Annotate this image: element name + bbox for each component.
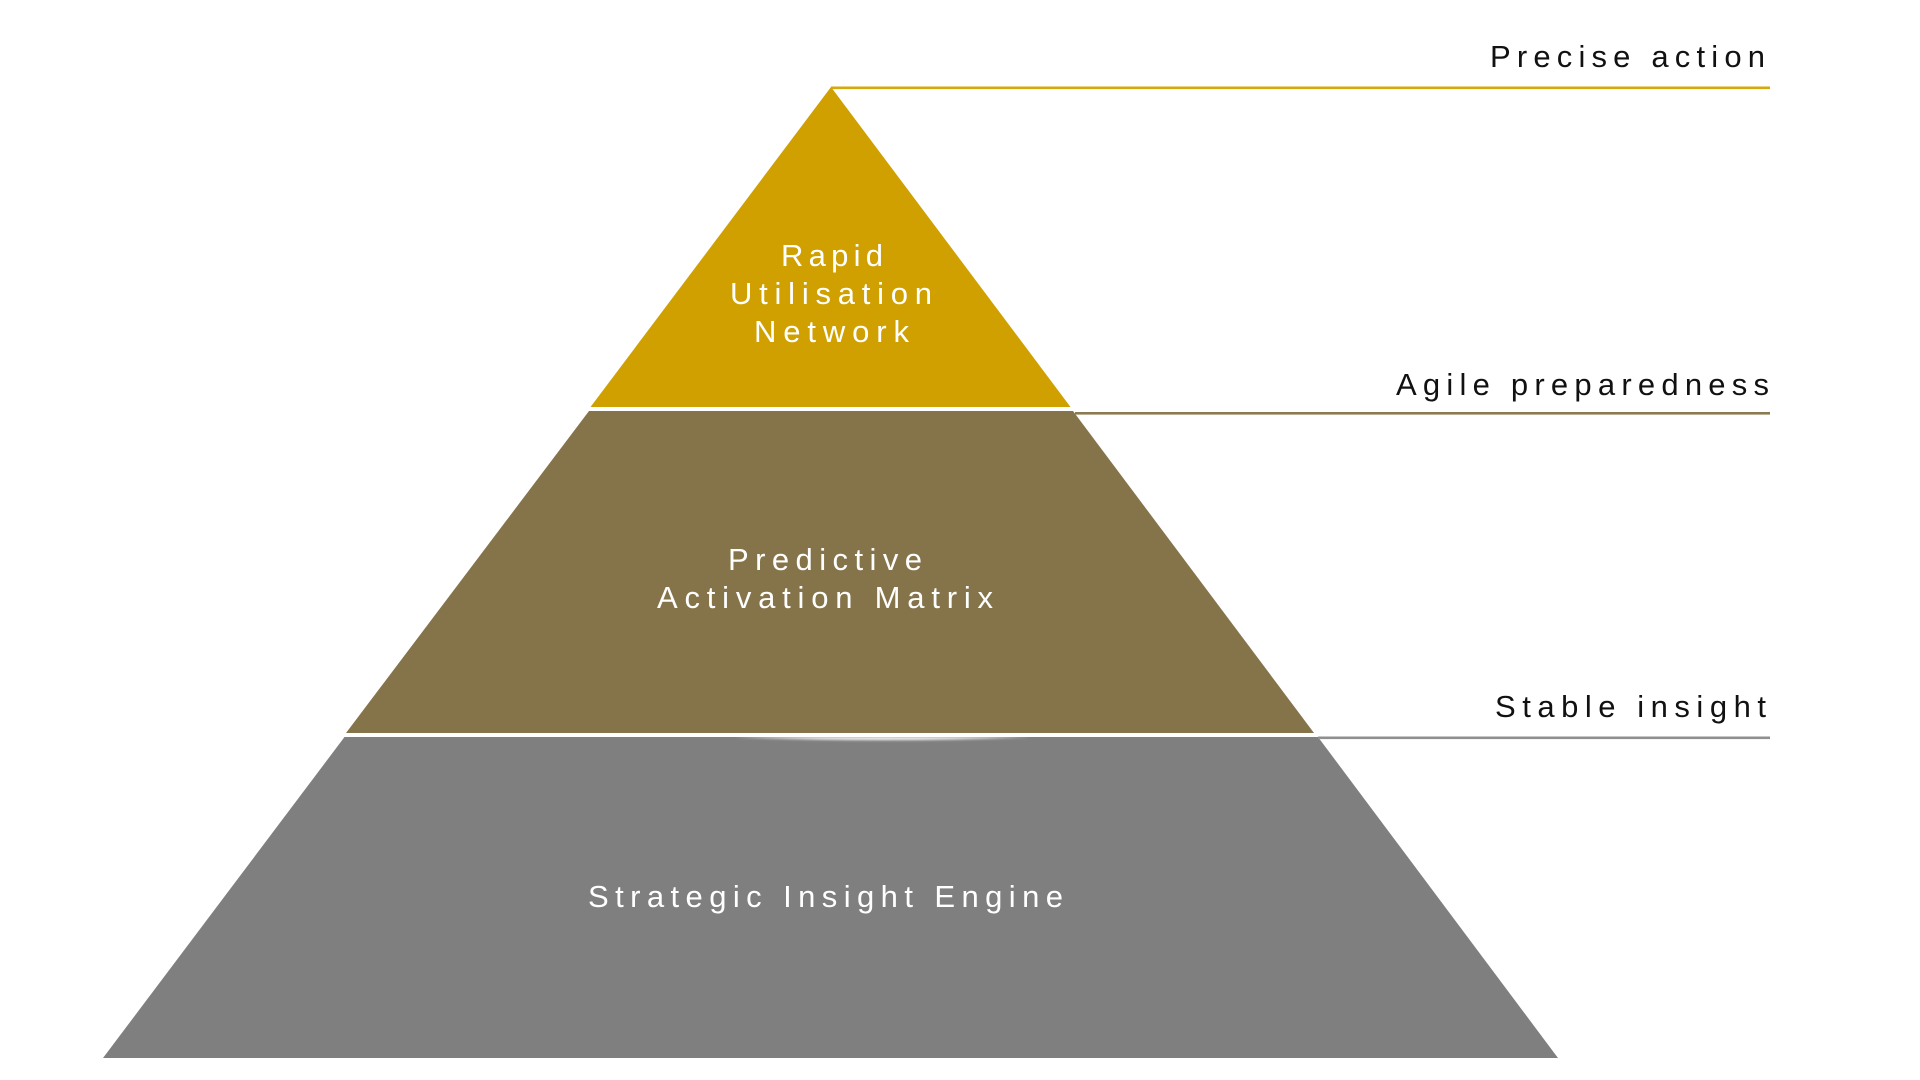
pyramid tier: Rapid Utilisation Network bbox=[590, 87, 1070, 407]
tier label: Predictive Activation Matrix bbox=[657, 542, 994, 615]
tier label: Strategic Insight Engine: Strategic Insight Engine bbox=[588, 879, 1063, 914]
side label: Precise action: Precise action bbox=[1490, 39, 1765, 74]
leader line: Stable insight bbox=[1318, 736, 1770, 739]
tier label: Predictive Activation Matrix: Predictive bbox=[728, 542, 922, 577]
side label: Agile preparedness: Agile preparedness bbox=[1396, 367, 1769, 402]
tier label: Rapid Utilisation Network: Network bbox=[754, 314, 910, 349]
leader line: Agile preparedness bbox=[1075, 412, 1770, 415]
tier label: Predictive Activation Matrix: Activation Matrix bbox=[657, 580, 994, 615]
pyramid tier: Strategic Insight Engine bbox=[103, 737, 1558, 1058]
tier label: Rapid Utilisation Network bbox=[730, 238, 932, 349]
tier label: Rapid Utilisation Network: Rapid bbox=[781, 238, 883, 273]
tier label: Rapid Utilisation Network: Utilisation bbox=[730, 276, 932, 311]
side label: Stable insight: Stable insight bbox=[1495, 689, 1766, 724]
pyramid tier: Predictive Activation Matrix bbox=[346, 411, 1314, 733]
leader line: Precise action bbox=[831, 86, 1770, 89]
